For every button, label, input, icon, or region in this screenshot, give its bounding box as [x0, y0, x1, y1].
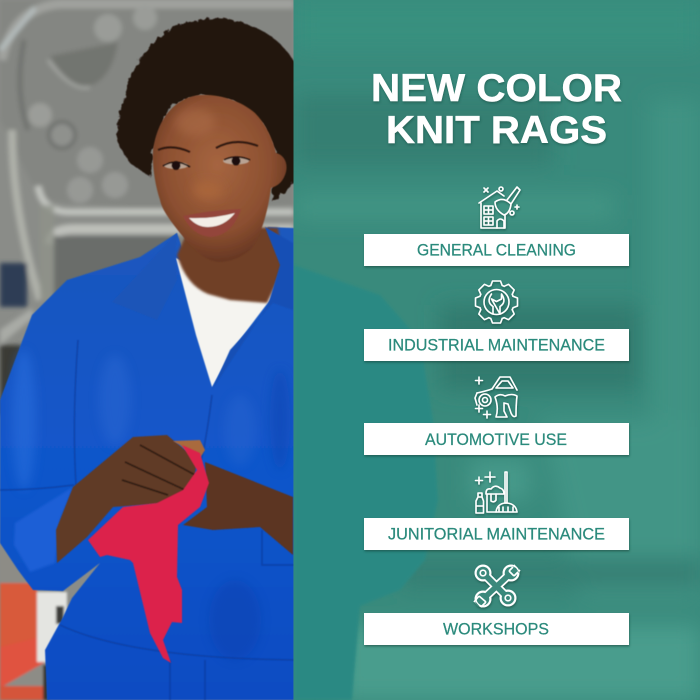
- icon: gear with wrench: [476, 281, 518, 323]
- rolled sleeve cuff: [14, 487, 73, 572]
- blue work jacket: [0, 227, 294, 700]
- icon: crossed wrenches: [474, 564, 520, 608]
- title: [371, 67, 622, 152]
- collar: [112, 233, 177, 320]
- label: industrial maintenance: INDUSTRIAL MAINTENANCE: [388, 336, 605, 354]
- car hood background: [0, 0, 294, 415]
- label: junitorial maintenance: [364, 518, 629, 550]
- title: NEW COLOR: [371, 67, 622, 110]
- afro hair: [117, 18, 297, 203]
- label: general cleaning: [364, 234, 629, 266]
- label: workshops: WORKSHOPS: [443, 620, 549, 638]
- icon: car wash: [475, 377, 517, 418]
- smile: [183, 209, 241, 237]
- panel: teal overlay with blurred garage: [294, 95, 699, 700]
- forearm and hand right: [183, 462, 293, 555]
- label: general cleaning: GENERAL CLEANING: [417, 240, 576, 260]
- label: junitorial maintenance: JUNITORIAL MAINTENANCE: [388, 524, 605, 544]
- forehead highlight: [176, 108, 213, 134]
- label: automotive use: AUTOMOTIVE USE: [425, 430, 567, 449]
- neck: [177, 225, 283, 303]
- teal silhouette of worker: [294, 265, 438, 700]
- blurred background shapes: [302, 101, 700, 700]
- label: industrial maintenance: [364, 329, 629, 361]
- icon: house with broom: [479, 187, 520, 228]
- title: KNIT RAGS: [386, 109, 607, 152]
- thumb: [173, 439, 206, 458]
- face: [153, 95, 287, 262]
- lower background equipment: [0, 581, 68, 700]
- eyes: [158, 142, 258, 170]
- label: workshops: [364, 613, 629, 645]
- panel: photo of smiling mechanic: [0, 0, 297, 700]
- icon: janitorial supplies: [476, 472, 517, 513]
- red knit rag: [88, 445, 209, 663]
- forearm and hand left: [56, 435, 197, 563]
- jacket shading: [12, 350, 290, 660]
- label: automotive use: [364, 423, 629, 455]
- white t-shirt: [176, 258, 274, 388]
- nose: [194, 183, 219, 200]
